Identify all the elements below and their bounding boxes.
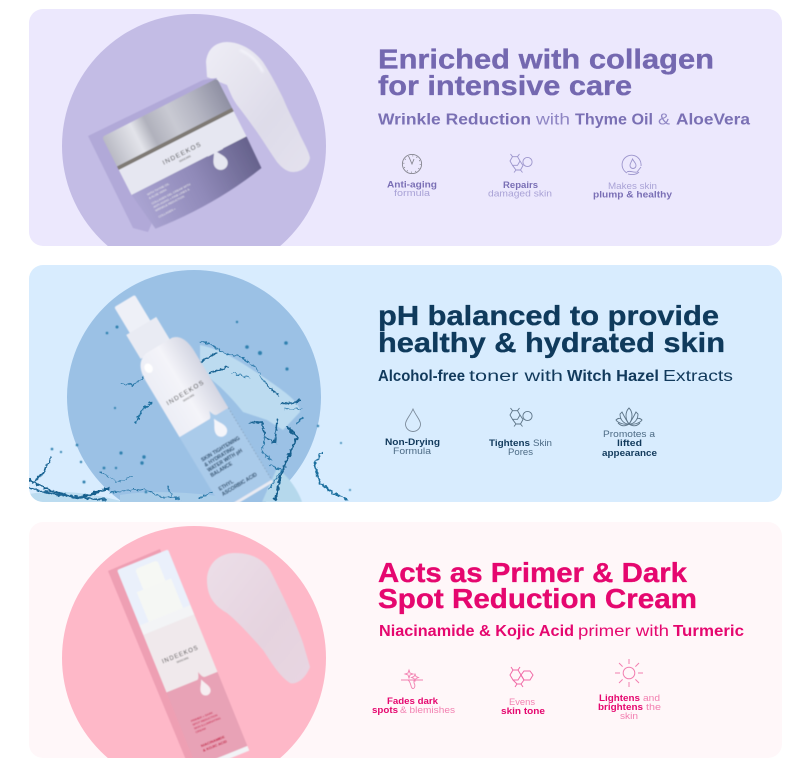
- label: repairs: [488, 180, 552, 198]
- label: evens: [501, 697, 545, 716]
- panel: toner: [29, 265, 782, 524]
- product image: bottle with water splash: ETHYL: [218, 479, 235, 493]
- label: tightens: Tightens: [489, 438, 530, 448]
- product image: jar and cream smear: & ALOE VERA: [148, 188, 167, 200]
- label: lightens: [598, 693, 661, 721]
- label: fades: spots: [372, 705, 398, 715]
- product image: pump bottle and cream smear: SKIN ILLUMINATING: [193, 716, 222, 731]
- icon: molecule: [510, 154, 532, 172]
- label: lifted: [602, 429, 657, 458]
- subheading: AloeVera: [676, 111, 750, 128]
- subheading: [379, 623, 744, 640]
- heading: Acts as Primer & Dark: [378, 557, 687, 588]
- product image: jar and cream smear: COLLAGEN +: [158, 207, 177, 219]
- label: lightens: and: [643, 693, 660, 703]
- label: non-drying: Formula: [393, 446, 432, 456]
- product image: bottle with water splash: & HYDRATING: [203, 446, 236, 469]
- label: tightens: [489, 438, 552, 457]
- label: repairs: Repairs: [503, 180, 538, 190]
- label: fades: [372, 696, 455, 715]
- icon: molecule: [510, 408, 532, 426]
- label: fades: & blemishes: [400, 705, 455, 715]
- heading: for intensive care: [378, 70, 632, 101]
- icon: hand with drop: [622, 155, 641, 175]
- label: repairs: damaged skin: [488, 188, 552, 198]
- product image: bottle with water splash: SKIN TIGHTENING: [200, 436, 241, 464]
- product image: jar and cream smear: ANTI-AGING + FINE LINES &: [153, 187, 190, 209]
- label: evens: Evens: [509, 697, 535, 707]
- label: lightens: skin: [620, 711, 638, 721]
- panel: collagen cream: [29, 9, 782, 246]
- icon: clock: [402, 154, 422, 174]
- label: plump: Makes skin: [608, 181, 657, 191]
- heading: [378, 557, 697, 614]
- heading: Spot Reduction Cream: [378, 583, 697, 614]
- product image: jar and cream smear: WITH THYME OIL: [146, 182, 170, 197]
- label: anti-aging: [387, 180, 437, 198]
- icon: lotus: [616, 408, 642, 426]
- label: plump: [593, 181, 673, 200]
- subheading: Extracts: [663, 368, 733, 385]
- subheading: &: [658, 111, 671, 128]
- label: evens: skin tone: [501, 706, 545, 716]
- icon: sun: [615, 659, 643, 687]
- icon: molecule: [510, 667, 533, 687]
- product image: pump bottle and cream smear: [62, 526, 326, 768]
- label: lifted: lifted: [617, 438, 642, 448]
- label: lifted: appearance: [602, 448, 657, 458]
- product image: bottle with water splash: ASCORBIC ACID: [221, 472, 259, 498]
- label: anti-aging: Anti-aging: [387, 180, 437, 190]
- product image: jar and cream smear: SKINCARE: [179, 155, 192, 163]
- label: lightens: the: [646, 702, 661, 712]
- heading: [378, 44, 714, 101]
- label: lightens: brightens: [598, 702, 643, 712]
- product image: bottle with water splash: [29, 270, 351, 524]
- product image: jar and cream smear: INDEEKOS: [162, 141, 203, 167]
- label: anti-aging: formula: [394, 188, 431, 198]
- icon: drop: [406, 409, 420, 432]
- panel: primer: [62, 526, 744, 758]
- product image: jar and cream smear: [62, 14, 326, 246]
- label: tightens: Pores: [508, 447, 533, 457]
- icon: skin sparkle: [401, 670, 423, 689]
- heading: healthy & hydrated skin: [378, 327, 725, 358]
- label: tightens: Skin: [533, 438, 552, 448]
- product image: pump bottle and cream smear: NIACINAMIDE: [200, 735, 226, 748]
- subheading: Turmeric: [673, 623, 744, 640]
- label: lightens: Lightens: [599, 693, 640, 703]
- subheading: toner with: [469, 368, 563, 385]
- product image: pump bottle and cream smear: SKINCARE: [176, 657, 189, 664]
- product image: pump bottle and cream smear: INDEEKOS: [161, 645, 200, 665]
- label: lifted: Promotes a: [603, 429, 656, 439]
- heading: Enriched with collagen: [378, 44, 714, 74]
- product image: bottle with water splash: BALANCE: [210, 461, 234, 479]
- subheading: primer with: [578, 623, 669, 640]
- product image: jar and cream smear: COLLAGEN GEL CREAM WITH: [151, 182, 191, 205]
- label: non-drying: [385, 437, 440, 456]
- subheading: with: [535, 111, 570, 128]
- product image: bottle with water splash: INDEEKOS: [165, 379, 206, 407]
- label: fades: Fades dark: [387, 696, 439, 706]
- label: plump: plump & healthy: [593, 190, 673, 200]
- product image: bottle with water splash: SKINCARE: [183, 394, 195, 403]
- subheading: [378, 111, 750, 128]
- product image: bottle with water splash: WATER WITH pH: [207, 448, 244, 474]
- subheading: Niacinamide & Kojic Acid: [379, 623, 574, 640]
- subheading: Witch Hazel: [567, 368, 659, 385]
- subheading: [378, 368, 733, 385]
- product image: pump bottle and cream smear: & KOJIC ACID: [202, 739, 228, 753]
- product image: pump bottle and cream smear: PRIMER + DARK: [190, 711, 214, 723]
- label: non-drying: Non-Drying: [385, 437, 440, 447]
- subheading: Thyme Oil: [575, 111, 653, 128]
- subheading: Wrinkle Reduction: [378, 111, 531, 128]
- product image: pump bottle and cream smear: SPOT REDUCTION: [192, 713, 218, 727]
- heading: [378, 300, 725, 358]
- heading: pH balanced to provide: [378, 300, 719, 331]
- product image: pump bottle and cream smear: CREAM: [195, 726, 207, 734]
- subheading: Alcohol-free: [378, 368, 465, 385]
- product image: jar and cream smear: WRINKLE REDUCTION: [154, 194, 185, 213]
